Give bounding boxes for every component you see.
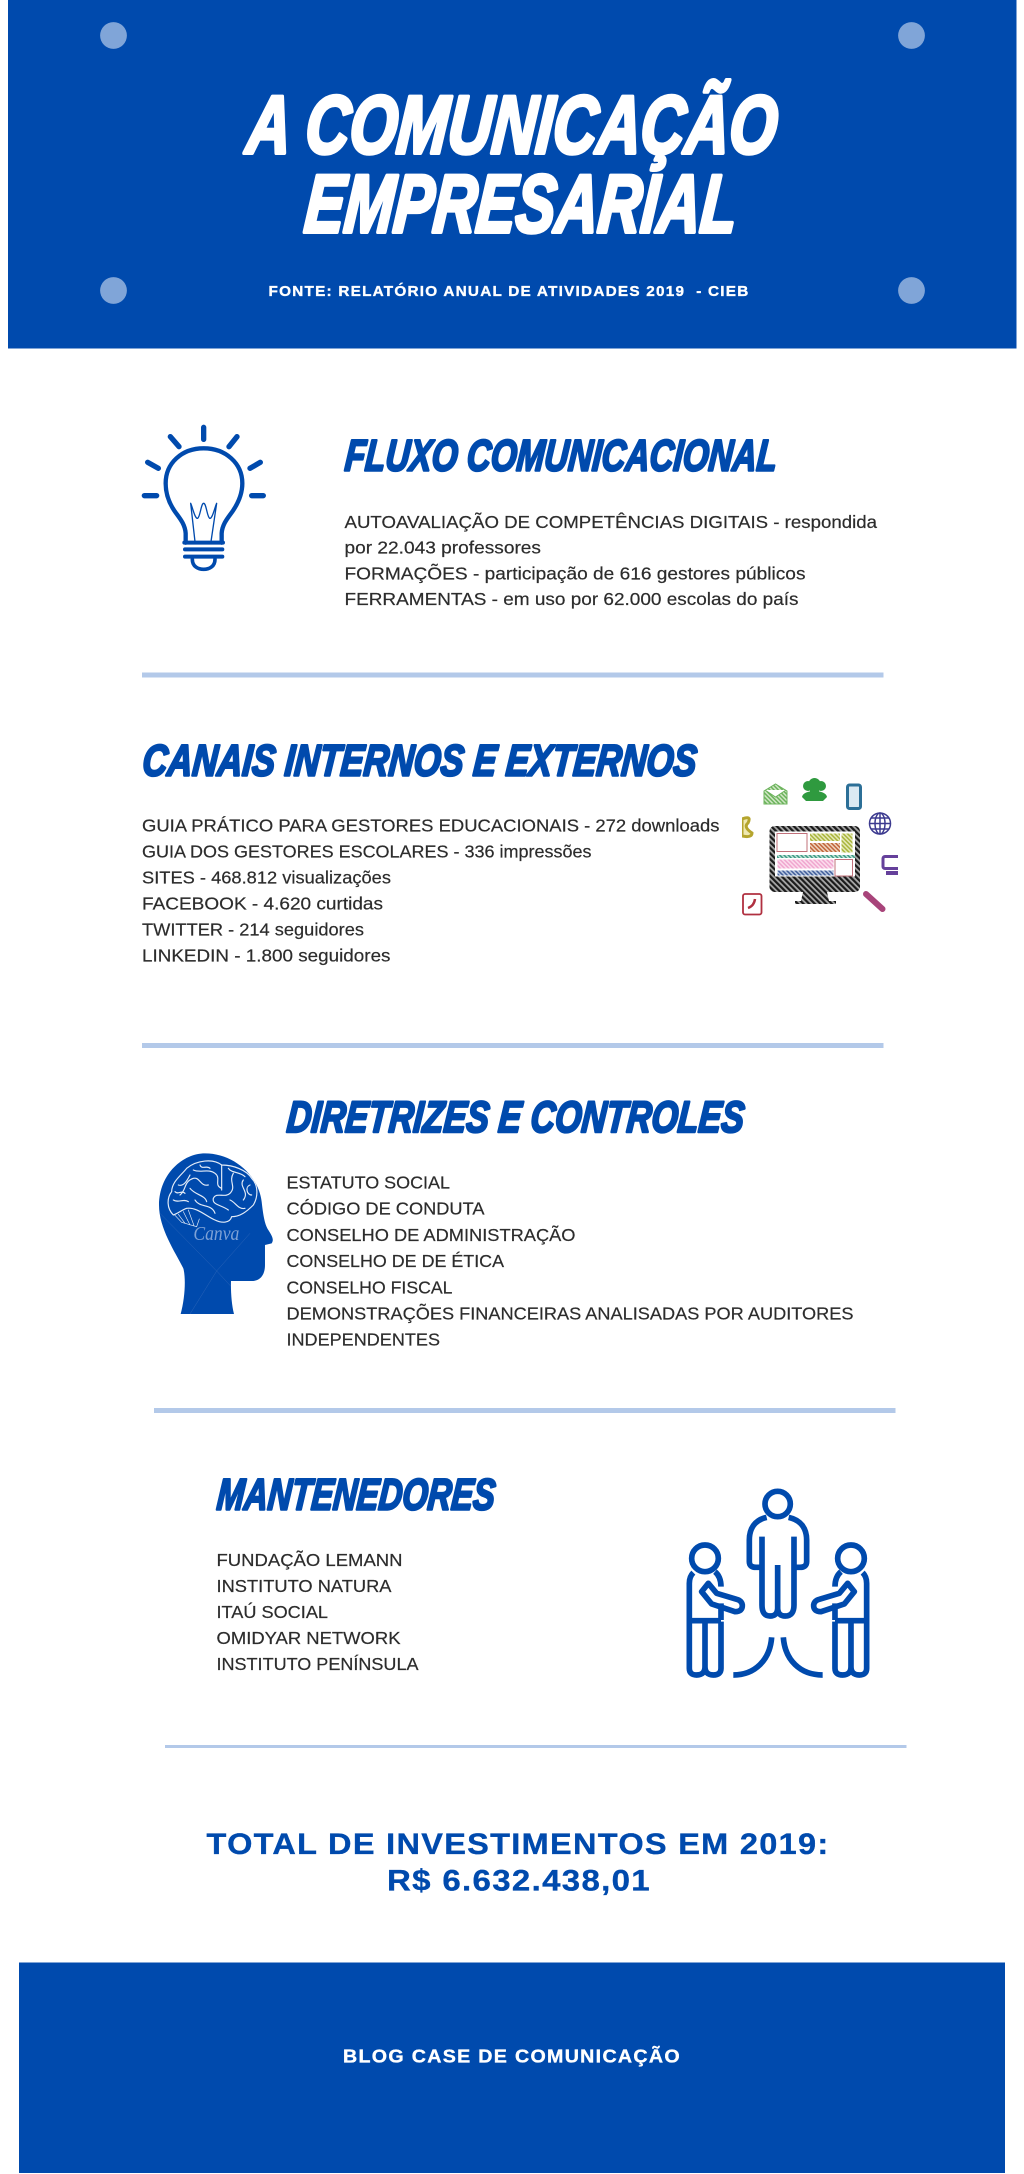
icon: three people [689, 1491, 867, 1675]
text block: fluxo: por 22.043 professores [344, 538, 541, 558]
text block: diretrizes [286, 1172, 854, 1350]
text block: canais: SITES - 468.812 visualizações [142, 868, 391, 888]
panel: fluxo comunicacional [144, 427, 877, 609]
heading: diretrizes: DIRETRIZES E CONTROLES [285, 1093, 746, 1142]
icon: people [802, 778, 827, 801]
icon: globe [870, 813, 890, 834]
text block: mantenedores: FUNDAÇÃO LEMANN [216, 1549, 402, 1570]
text block: mantenedores: ITAÚ SOCIAL [216, 1601, 328, 1622]
text block: fluxo: FORMAÇÕES - participação de 616 gestores públicos [344, 562, 806, 583]
icon: envelope [764, 784, 787, 804]
monitor [770, 826, 860, 904]
icon: pencil [866, 894, 882, 909]
heading: canais: CANAIS INTERNOS E EXTERNOS [141, 737, 699, 785]
source line: FONTE: RELATÓRIO ANUAL DE ATIVIDADES 2019 - CIEB [268, 282, 750, 300]
text block: diretrizes: CÓDIGO DE CONDUTA [286, 1198, 485, 1219]
text block: mantenedores: INSTITUTO NATURA [216, 1576, 392, 1596]
text block: canais: GUIA PRÁTICO PARA GESTORES EDUCACIONAIS - 272 downloads [142, 816, 720, 836]
heading: mantenedores: MANTENEDORES [215, 1471, 497, 1519]
watermark: Canva [193, 1223, 239, 1245]
title [242, 80, 781, 250]
icon: smartphone [848, 785, 860, 808]
decorative corner dot bottom right [898, 277, 925, 304]
text block: diretrizes: CONSELHO DE ADMINISTRAÇÃO [286, 1224, 576, 1245]
text block: diretrizes: ESTATUTO SOCIAL [286, 1172, 450, 1192]
total investments callout [206, 1828, 830, 1898]
title: EMPRESARIAL [301, 159, 741, 250]
footer banner [19, 1962, 1005, 2173]
text block: fluxo: FERRAMENTAS - em uso por 62.000 escolas do país [344, 589, 799, 609]
heading: fluxo comunicacional: FLUXO COMUNICACIONAL [343, 432, 779, 480]
icon: telephone tile [743, 894, 762, 914]
text block: mantenedores: INSTITUTO PENÍNSULA [216, 1654, 419, 1674]
text block: mantenedores [216, 1549, 419, 1674]
right figure [814, 1545, 867, 1675]
text block: fluxo: AUTOAVALIAÇÃO DE COMPETÊNCIAS DIGITAIS - respondida [344, 511, 877, 532]
left figure [689, 1545, 742, 1675]
text block: diretrizes: INDEPENDENTES [286, 1330, 440, 1350]
icon: light bulb [144, 427, 263, 569]
header banner [8, 0, 1016, 348]
icon: purple device [883, 856, 905, 873]
decorative corner dot top left [100, 22, 127, 49]
decorative corner dot top right [898, 22, 925, 49]
footer label: BLOG CASE DE COMUNICAÇÃO [343, 2046, 681, 2067]
text block: mantenedores: OMIDYAR NETWORK [216, 1628, 401, 1648]
total investments callout: R$ 6.632.438,01 [387, 1865, 651, 1898]
curved floor lines [733, 1637, 823, 1675]
title: A COMUNICAÇÃO [242, 80, 781, 171]
text block: canais: GUIA DOS GESTORES ESCOLARES - 336 impressões [142, 842, 592, 862]
illustration: sketched monitor with icons [742, 778, 905, 914]
text block: diretrizes: DEMONSTRAÇÕES FINANCEIRAS ANALISADAS POR AUDITORES [286, 1302, 854, 1324]
text block: fluxo [344, 511, 877, 609]
decorative corner dot bottom left [100, 277, 127, 304]
icon: location pin [742, 818, 752, 837]
text block: canais [142, 816, 720, 966]
panel: canais internos e externos [141, 737, 905, 966]
text block: diretrizes: CONSELHO DE DE ÉTICA [286, 1251, 504, 1271]
text block: diretrizes: CONSELHO FISCAL [286, 1277, 453, 1297]
central figure [749, 1491, 807, 1616]
icon: head with brain [159, 1153, 273, 1314]
text block: canais: TWITTER - 214 seguidores [142, 920, 364, 940]
text block: canais: LINKEDIN - 1.800 seguidores [142, 946, 391, 966]
text block: canais: FACEBOOK - 4.620 curtidas [142, 894, 383, 914]
total investments callout: TOTAL DE INVESTIMENTOS EM 2019: [206, 1828, 830, 1861]
panel: mantenedores [215, 1471, 867, 1675]
panel: diretrizes e controles [159, 1093, 854, 1350]
